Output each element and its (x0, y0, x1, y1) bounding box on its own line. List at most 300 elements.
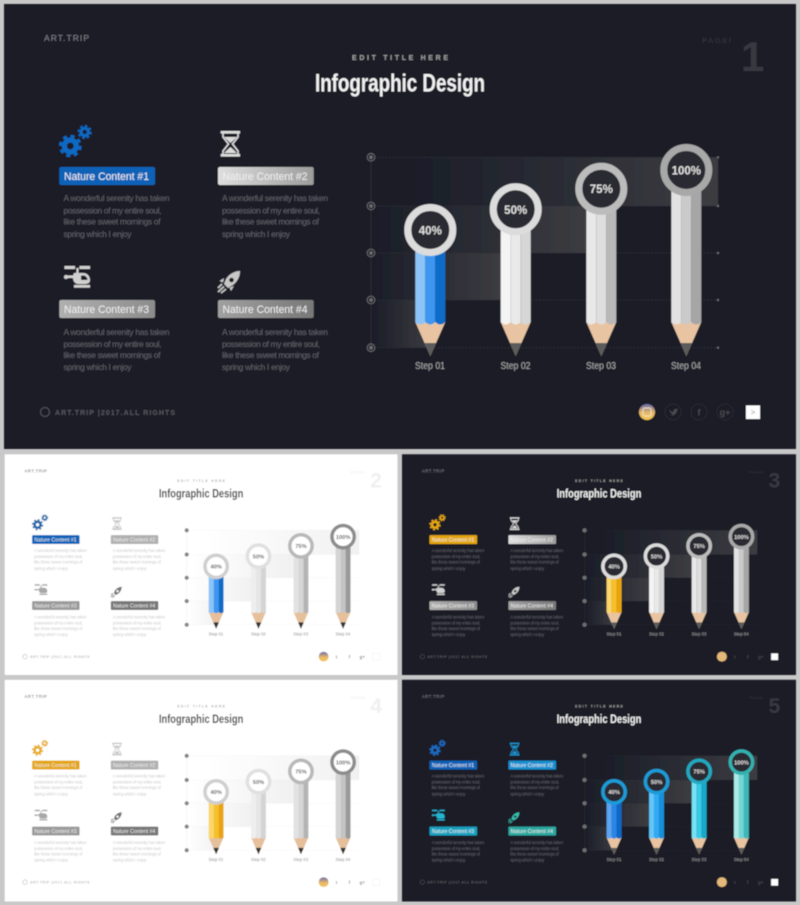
text block 2: A wonderful serenity has taken (113, 773, 166, 778)
text block 1: like these sweet mornings of (64, 216, 161, 226)
slide background (402, 680, 796, 901)
pencil 3: 75%: 75% (693, 544, 705, 550)
text block 4 (510, 840, 564, 862)
pill: Nature Content 3 (32, 827, 80, 836)
text block 1 (64, 193, 170, 239)
text block 1: spring which I enjoy (34, 791, 69, 796)
text block 4: possession of my entire soul, (113, 620, 161, 625)
text block 2 (510, 774, 564, 796)
text block 2: like these sweet mornings of (222, 216, 320, 226)
pill: Nature Content 2: Nature Content #2 (222, 171, 308, 183)
subtitle: EDIT TITLE HERE (177, 705, 226, 709)
pill: Nature Content 1 (32, 535, 80, 544)
text block 3: A wonderful serenity has taken (34, 614, 87, 619)
step labels: Step 03 (692, 631, 707, 637)
icon: gears (430, 515, 445, 530)
icon: helicopter (34, 584, 47, 595)
pill: Nature Content 3: Nature Content #3 (432, 829, 474, 835)
text block 1: like these sweet mornings of (34, 560, 83, 565)
text block 1: possession of my entire soul, (432, 780, 480, 785)
text block 3: possession of my entire soul, (432, 620, 480, 625)
text block 3: like these sweet mornings of (432, 626, 481, 631)
pill: Nature Content 1: Nature Content #1 (432, 538, 474, 544)
icon: hourglass (510, 517, 519, 530)
footer copyright: ART.TRIP |2017.ALL RIGHTS (30, 881, 90, 885)
axis nodes (185, 754, 189, 852)
page label: PAGE/ (351, 696, 365, 700)
text block 1 (34, 548, 87, 571)
text block 4: like these sweet mornings of (510, 851, 560, 856)
text block 4: A wonderful serenity has taken (113, 614, 166, 619)
text block 4: like these sweet mornings of (113, 626, 162, 631)
icon: helicopter (432, 584, 445, 595)
pill: Nature Content 2: Nature Content #2 (113, 763, 155, 769)
social icons: f (747, 880, 749, 885)
text block 1: A wonderful serenity has taken (64, 193, 170, 203)
icon: helicopter (64, 266, 90, 288)
text block 1: like these sweet mornings of (432, 785, 481, 790)
axis nodes (185, 528, 189, 627)
text block 4: spring which I enjoy (510, 632, 545, 637)
text block 3: spring which I enjoy (64, 362, 132, 372)
text block 1: A wonderful serenity has taken (34, 773, 87, 778)
text block 2: spring which I enjoy (510, 791, 545, 796)
next button (373, 879, 380, 886)
next button: > (751, 408, 756, 417)
pencil 4: 100%: 100% (734, 535, 749, 541)
brand label: ART.TRIP (422, 694, 444, 699)
pill: Nature Content 3 (430, 601, 477, 610)
pill: Nature Content 4: Nature Content #4 (511, 829, 553, 835)
social icons: t (734, 654, 736, 659)
text block 3 (432, 840, 485, 862)
text block 2: like these sweet mornings of (113, 785, 162, 790)
text block 4: spring which I enjoy (222, 362, 291, 372)
pencil 2: 50%: 50% (253, 554, 264, 560)
pencil 3: 75% (688, 535, 710, 629)
pill: Nature Content 4 (111, 601, 158, 610)
step labels: Step 03 (692, 857, 707, 863)
footer copyright: ART.TRIP |2017.ALL RIGHTS (55, 410, 175, 417)
pencil 3: 75%: 75% (590, 184, 613, 196)
text block 1: A wonderful serenity has taken (432, 774, 485, 778)
footer copyright (40, 408, 175, 417)
text block 3: spring which I enjoy (432, 632, 466, 637)
chart axis and grid (585, 756, 757, 850)
page number: 2 (370, 470, 382, 493)
text block 3: possession of my entire soul, (432, 846, 480, 851)
text block 4 (510, 614, 564, 637)
text block 2: A wonderful serenity has taken (222, 193, 328, 203)
footer copyright: ART.TRIP |2017.ALL RIGHTS (427, 655, 488, 659)
text block 1: like these sweet mornings of (432, 560, 481, 565)
pencil 2: 50% (645, 545, 668, 629)
title: Infographic Design (557, 712, 641, 726)
icon: hourglass (112, 517, 122, 530)
text block 4 (222, 327, 328, 372)
text block 3 (34, 614, 87, 637)
icon: gears (33, 515, 48, 530)
pencil 3: 75% (290, 535, 312, 629)
pill: Nature Content 1: Nature Content #1 (34, 538, 77, 544)
text block 3: possession of my entire soul, (34, 620, 83, 625)
icon: rocket (508, 812, 519, 823)
social icons (319, 877, 365, 887)
text block 1 (34, 773, 87, 796)
pencil 3: 75%: 75% (693, 770, 705, 776)
pencil 3: 75% (688, 760, 710, 854)
text block 3 (432, 614, 485, 637)
slide background (5, 454, 398, 675)
pill: Nature Content 2 (111, 761, 158, 770)
icon: hourglass (112, 743, 122, 755)
pill: Nature Content 1 (430, 535, 477, 544)
text block 2: like these sweet mornings of (510, 560, 560, 565)
title: Infographic Design (315, 70, 485, 98)
social icons: g+ (360, 654, 365, 659)
pill: Nature Content 4 (111, 827, 158, 836)
pencil 2: 50% (645, 770, 668, 854)
chart: pencil bars (185, 751, 359, 863)
pencil 1: 40%: 40% (210, 565, 222, 571)
text block 2: like these sweet mornings of (113, 560, 162, 565)
step labels (415, 361, 701, 372)
pencil 2: 50% (247, 770, 270, 854)
next button (746, 406, 760, 419)
step labels (209, 857, 351, 863)
step labels: Step 02 (649, 631, 664, 637)
text block 2: spring which I enjoy (222, 229, 291, 239)
text block 4 (113, 614, 166, 637)
footer copyright: ART.TRIP |2017.ALL RIGHTS (427, 881, 488, 885)
pencil 2: 50% (493, 187, 538, 356)
social icons: f (349, 654, 351, 659)
pencil 4: 100%: 100% (336, 760, 350, 766)
step labels: Step 01 (415, 361, 445, 372)
pencil 3: 75%: 75% (295, 770, 307, 776)
icon: helicopter (34, 810, 47, 820)
text block 2: A wonderful serenity has taken (113, 548, 166, 553)
pencil 2: 50%: 50% (504, 205, 527, 217)
step labels: Step 02 (251, 631, 266, 637)
pencil 1: 40%: 40% (210, 790, 222, 796)
slide background (4, 4, 796, 449)
pill: Nature Content 4 (508, 601, 556, 610)
social icons: f (698, 408, 702, 418)
pencil 4: 100% (730, 525, 753, 629)
step labels: Step 01 (209, 857, 224, 863)
text block 3: A wonderful serenity has taken (432, 614, 485, 619)
text block 2 (113, 548, 166, 571)
chart axis and grid (187, 756, 359, 850)
page number: 5 (769, 695, 781, 718)
text block 2: possession of my entire soul, (113, 780, 161, 785)
pencil 4: 100%: 100% (734, 760, 749, 766)
pencil 3: 75% (579, 166, 624, 356)
step labels: Step 01 (209, 631, 224, 637)
page number: 1 (741, 33, 764, 80)
step labels: Step 01 (606, 857, 622, 863)
step labels: Step 04 (671, 361, 701, 372)
text block 3: A wonderful serenity has taken (432, 840, 485, 845)
text block 3: spring which I enjoy (34, 857, 69, 862)
text block 4: spring which I enjoy (113, 632, 147, 637)
chart axis and grid (585, 530, 757, 625)
subtitle: EDIT TITLE HERE (575, 479, 624, 483)
axis nodes (367, 154, 719, 352)
pill: Nature Content 2: Nature Content #2 (511, 538, 553, 544)
chart: pencil bars (583, 525, 757, 637)
pill: Nature Content 3: Nature Content #3 (432, 604, 474, 610)
pencil 1: 40%: 40% (419, 226, 442, 238)
pencil 1: 40% (603, 781, 625, 854)
panel: slide 1 dark blue (4, 4, 796, 449)
text block 1: spring which I enjoy (432, 791, 466, 796)
pill: Nature Content 4: Nature Content #4 (511, 604, 553, 610)
step labels: Step 02 (649, 857, 664, 863)
pill: Nature Content 3: Nature Content #3 (34, 604, 77, 610)
social icons (717, 877, 764, 887)
text block 1: spring which I enjoy (432, 566, 466, 571)
social icons: t (734, 880, 736, 885)
chart bands (187, 530, 359, 625)
text block 3: possession of my entire soul, (34, 846, 83, 851)
text block 3: like these sweet mornings of (432, 851, 481, 856)
text block 4: possession of my entire soul, (222, 339, 320, 349)
social icons: f (349, 880, 351, 885)
text block 1: possession of my entire soul, (64, 206, 162, 216)
brand label: ART.TRIP (44, 33, 89, 43)
chart axis and grid (187, 530, 359, 625)
panel: slide 4 light yellow (5, 680, 398, 901)
icon: rocket (508, 587, 519, 598)
pill: Nature Content 2 (218, 167, 314, 185)
text block 4: A wonderful serenity has taken (113, 840, 166, 845)
text block 2: like these sweet mornings of (510, 785, 560, 790)
step labels: Step 03 (293, 631, 308, 637)
pill: Nature Content 3 (59, 300, 155, 318)
text block 1: possession of my entire soul, (432, 554, 480, 559)
panel: slide 3 dark yellow (402, 454, 796, 675)
slide background (402, 454, 796, 675)
step labels: Step 03 (293, 857, 308, 863)
step labels: Step 02 (500, 361, 531, 372)
pencil 3: 75%: 75% (295, 544, 307, 550)
chart bands (187, 756, 359, 850)
text block 1: A wonderful serenity has taken (34, 548, 87, 553)
text block 4: A wonderful serenity has taken (510, 614, 564, 619)
social icons: g+ (758, 654, 764, 659)
page label: PAGE/ (351, 471, 365, 475)
text block 3 (34, 840, 87, 862)
text block 2: possession of my entire soul, (222, 206, 320, 216)
pill: Nature Content 4: Nature Content #4 (222, 304, 308, 316)
pill: Nature Content 4: Nature Content #4 (113, 829, 155, 835)
step labels: Step 04 (336, 857, 351, 863)
pencil 4: 100% (332, 751, 354, 854)
step labels: Step 04 (734, 631, 749, 637)
text block 4: spring which I enjoy (510, 857, 545, 862)
next button (771, 653, 778, 660)
text block 2: spring which I enjoy (510, 566, 545, 571)
text block 2: possession of my entire soul, (113, 554, 161, 559)
text block 2 (113, 773, 166, 796)
brand label: ART.TRIP (25, 469, 47, 474)
text block 3: like these sweet mornings of (64, 350, 161, 360)
pencil 1: 40% (205, 555, 227, 629)
step labels (606, 857, 749, 863)
text block 4: possession of my entire soul, (510, 846, 559, 851)
pencil 2: 50%: 50% (651, 554, 662, 560)
text block 2: A wonderful serenity has taken (510, 774, 564, 778)
text block 4: A wonderful serenity has taken (222, 327, 328, 337)
text block 4: like these sweet mornings of (510, 626, 560, 631)
text block 2: spring which I enjoy (113, 566, 147, 571)
text block 2: possession of my entire soul, (510, 554, 559, 559)
text block 1: possession of my entire soul, (34, 780, 83, 785)
icon: hourglass (510, 743, 519, 755)
pill: Nature Content 2: Nature Content #2 (113, 538, 155, 544)
subtitle: EDIT TITLE HERE (352, 55, 448, 62)
icon: rocket (111, 812, 122, 823)
icon: gears (33, 740, 48, 755)
page number: 3 (769, 470, 780, 493)
text block 1 (432, 774, 485, 796)
text block 2 (222, 193, 328, 239)
pill: Nature Content 3: Nature Content #3 (64, 304, 149, 316)
pencil 4: 100% (332, 525, 354, 629)
axis nodes (583, 754, 586, 852)
pencil 2: 50% (247, 545, 270, 629)
text block 3: like these sweet mornings of (34, 626, 83, 631)
page label: PAGE/ (749, 471, 764, 475)
page label: PAGE/ (749, 696, 764, 700)
step labels: Step 02 (251, 857, 266, 863)
pill: Nature Content 3 (430, 827, 477, 836)
next button (373, 653, 380, 660)
pill: Nature Content 1: Nature Content #1 (64, 171, 149, 183)
text block 4: like these sweet mornings of (113, 851, 162, 856)
title: Infographic Design (159, 487, 243, 501)
text block 3: A wonderful serenity has taken (64, 327, 170, 337)
icon: rocket (111, 587, 122, 598)
pill: Nature Content 2 (111, 535, 158, 544)
pill: Nature Content 3: Nature Content #3 (34, 829, 77, 835)
subtitle: EDIT TITLE HERE (575, 705, 624, 709)
chart: pencil bars (583, 751, 757, 863)
pill: Nature Content 3 (32, 601, 80, 610)
social icons (717, 652, 764, 662)
social icons: t (336, 880, 338, 885)
icon: hourglass (221, 131, 240, 157)
text block 2 (510, 548, 564, 571)
footer copyright: ART.TRIP |2017.ALL RIGHTS (30, 655, 90, 659)
page number: 4 (370, 695, 382, 718)
chart: pencil bars (367, 148, 719, 372)
step labels (606, 631, 749, 637)
pill: Nature Content 1 (430, 761, 477, 770)
text block 3 (64, 327, 170, 372)
step labels (209, 631, 351, 637)
text block 1: spring which I enjoy (34, 566, 69, 571)
text block 4: possession of my entire soul, (113, 846, 161, 851)
text block 4: A wonderful serenity has taken (510, 840, 564, 845)
brand label: ART.TRIP (25, 694, 47, 699)
brand label: ART.TRIP (422, 469, 444, 474)
text block 4 (113, 840, 166, 862)
pencil 1: 40%: 40% (608, 790, 620, 796)
social icons: t (336, 654, 338, 659)
pill: Nature Content 2 (508, 535, 556, 544)
title: Infographic Design (159, 712, 243, 726)
chart: pencil bars (185, 525, 359, 637)
pencil 4: 100%: 100% (672, 166, 701, 178)
pill: Nature Content 2 (508, 761, 556, 770)
pencil 3: 75% (290, 760, 312, 854)
pencil 2: 50%: 50% (253, 780, 264, 786)
text block 1 (432, 548, 485, 571)
chart bands (372, 157, 718, 348)
pill: Nature Content 1 (32, 761, 80, 770)
text block 4: like these sweet mornings of (222, 350, 320, 360)
step labels: Step 01 (606, 631, 622, 637)
slide background (5, 680, 398, 901)
pill: Nature Content 2: Nature Content #2 (511, 763, 553, 769)
social icons: g+ (720, 408, 730, 418)
text block 3: possession of my entire soul, (64, 339, 162, 349)
pill: Nature Content 1: Nature Content #1 (34, 763, 77, 769)
chart bands (585, 756, 757, 850)
panel: slide 2 light blue (5, 454, 398, 675)
text block 2: A wonderful serenity has taken (510, 548, 564, 553)
pill: Nature Content 1: Nature Content #1 (432, 763, 474, 769)
pencil 2: 50%: 50% (651, 780, 662, 786)
social icons: f (747, 654, 749, 659)
step labels: Step 04 (734, 857, 749, 863)
pencil 4: 100% (664, 148, 709, 356)
icon: gears (430, 740, 445, 755)
social icons (639, 404, 733, 420)
pencil 1: 40% (603, 555, 625, 629)
text block 1: possession of my entire soul, (34, 554, 83, 559)
text block 3: spring which I enjoy (432, 857, 466, 862)
icon: gears (61, 126, 91, 156)
chart axis and grid (371, 157, 718, 348)
title: Infographic Design (557, 487, 641, 501)
step labels: Step 04 (336, 631, 351, 637)
text block 2: spring which I enjoy (113, 791, 147, 796)
pencil 4: 100% (730, 751, 753, 854)
panel: slide 5 dark teal (402, 680, 796, 901)
text block 4: spring which I enjoy (113, 857, 147, 862)
pill: Nature Content 1 (59, 167, 155, 185)
social icons (319, 652, 365, 662)
icon: helicopter (432, 810, 445, 820)
pencil 1: 40% (205, 781, 227, 854)
text block 1: like these sweet mornings of (34, 785, 83, 790)
pencil 1: 40% (408, 208, 453, 356)
text block 2: possession of my entire soul, (510, 780, 559, 785)
axis nodes (583, 528, 586, 627)
pencil 1: 40%: 40% (608, 565, 620, 571)
text block 3: like these sweet mornings of (34, 851, 83, 856)
chart bands (585, 530, 757, 625)
text block 4: possession of my entire soul, (510, 620, 559, 625)
pencil 4: 100%: 100% (336, 535, 350, 541)
social icons: g+ (758, 880, 764, 885)
icon: rocket (218, 271, 240, 293)
pill: Nature Content 4 (508, 827, 556, 836)
